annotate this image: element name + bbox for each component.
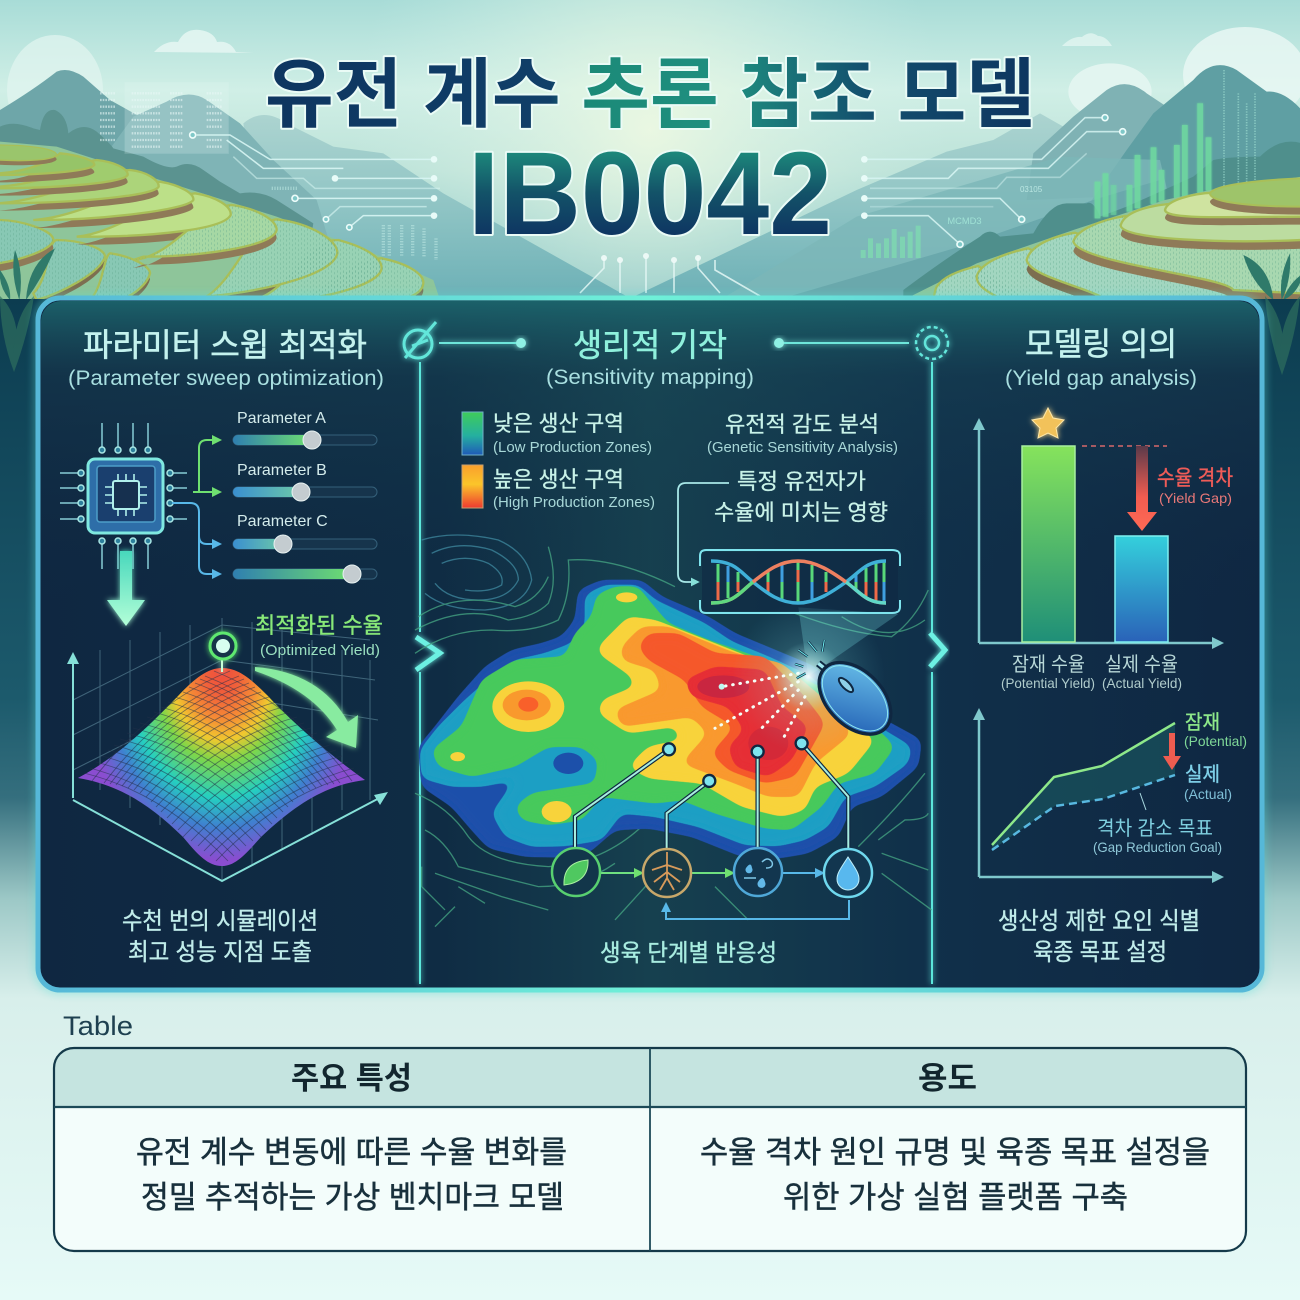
arrow: gap	[1163, 733, 1181, 770]
label: potential yield	[1001, 653, 1095, 691]
circuit end dots left	[332, 156, 437, 219]
heading: physiological mechanism: 생리적 기작	[573, 327, 727, 363]
circuit end dots right	[861, 156, 868, 219]
title code: IB0042	[468, 128, 832, 260]
table cell: use	[700, 1135, 1210, 1215]
peak marker	[210, 633, 236, 672]
rice plant right	[1243, 253, 1300, 300]
circuit lines left	[197, 135, 440, 227]
chevron left	[416, 637, 440, 670]
label: potential yield: (Potential Yield)	[1001, 675, 1095, 691]
table header: key characteristics: 주요 특성	[291, 1061, 412, 1096]
slider: parameter B	[233, 462, 377, 501]
caption: breeding goals: 생산성 제한 요인 식별	[998, 908, 1200, 935]
heading: parameter sweep: 파라미터 스윕 최적화	[83, 327, 367, 363]
small bars	[861, 226, 921, 258]
label: yield gap: 수율 격차	[1157, 467, 1233, 490]
slider: fourth	[233, 565, 377, 583]
arrow: descent curve	[255, 667, 358, 748]
DNA panel	[700, 550, 900, 613]
subheading: sensitivity: (Sensitivity mapping)	[546, 366, 754, 389]
legend: high production: (High Production Zones)	[493, 494, 655, 511]
icon: star	[1032, 408, 1064, 438]
table cell: characteristics	[136, 1135, 567, 1215]
slider: parameter A: Parameter A	[237, 410, 326, 427]
label: optimized yield: (Optimized Yield)	[260, 642, 380, 659]
header connector left	[439, 338, 526, 348]
legend: low production: (Low Production Zones)	[493, 439, 652, 456]
header connector right	[774, 338, 909, 348]
label: actual yield: (Actual Yield)	[1102, 675, 1182, 691]
background lower page gradient	[0, 296, 1300, 1300]
chevron right	[930, 633, 945, 667]
panel: modeling meaning	[973, 326, 1247, 966]
main dashboard panel	[33, 293, 1267, 995]
chart: 3D yield surface	[67, 618, 388, 881]
rice plant left	[0, 248, 55, 300]
code label 2: MCMD3	[947, 216, 982, 226]
spark ticks	[795, 640, 824, 678]
column dividers	[420, 362, 932, 984]
gene arrow	[678, 483, 729, 582]
stage: water	[824, 849, 872, 897]
code label: 03105	[1020, 185, 1043, 194]
forest silhouette left	[0, 110, 314, 228]
stage: nutrients	[734, 848, 782, 896]
rice terraces right	[912, 176, 1300, 299]
label: actual: 실제	[1185, 763, 1220, 786]
label: gap reduction goal	[1093, 817, 1222, 855]
slider: parameter C	[233, 513, 377, 553]
topographic lines	[415, 535, 932, 927]
circuit nodes right	[957, 115, 1126, 247]
label: actual	[1184, 763, 1232, 802]
table cell: use: 수율 격차 원인 규명 및 육종 목표 설정을	[700, 1135, 1210, 1170]
label: potential	[1184, 711, 1247, 749]
stage: leaf	[552, 848, 600, 896]
chart: gap line	[973, 708, 1247, 883]
heat map	[418, 580, 922, 858]
caption: breeding goals	[998, 908, 1200, 966]
arrow: chip to surface	[107, 551, 145, 626]
panel: parameter sweep	[60, 327, 388, 966]
caption: breeding goals: 육종 목표 설정	[1033, 939, 1167, 966]
table cell: characteristics: 유전 계수 변동에 따른 수율 변화를	[136, 1135, 567, 1170]
light cone	[798, 607, 898, 677]
dotted rays	[715, 673, 805, 738]
table cell: use: 위한 가상 실험 플랫폼 구축	[783, 1180, 1128, 1215]
side leaves	[0, 296, 1300, 375]
subheading: yield gap: (Yield gap analysis)	[1005, 367, 1197, 390]
stage: roots	[643, 849, 691, 897]
label: potential yield: 잠재 수율	[1012, 653, 1085, 676]
title: 유전 계수 추론 참조 모델	[265, 53, 1035, 138]
label: actual yield: 실제 수율	[1105, 653, 1178, 676]
caption: growth stage response: 생육 단계별 반응성	[600, 940, 777, 967]
circuit lines right	[865, 118, 1119, 243]
table header: use: 용도	[918, 1061, 977, 1096]
icon: chip	[60, 423, 187, 569]
label: genetic sensitivity: (Genetic Sensitivity Analysis)	[707, 439, 898, 456]
legend: low production	[462, 411, 652, 456]
left landscape	[0, 70, 633, 307]
data strips	[272, 188, 436, 260]
label: optimized yield	[255, 613, 383, 659]
green bars right	[1095, 103, 1211, 218]
label: yield gap: (Yield Gap)	[1159, 490, 1232, 506]
title	[265, 53, 1035, 260]
table	[54, 1048, 1246, 1251]
label: yield gap	[1157, 467, 1233, 506]
legend: low production: 낮은 생산 구역	[493, 411, 624, 436]
forest silhouette right	[903, 142, 1300, 300]
legend: high production: 높은 생산 구역	[493, 467, 624, 492]
table caption: Table	[63, 1011, 133, 1041]
slider: parameter B: Parameter B	[237, 462, 327, 479]
slider: parameter C: Parameter C	[237, 513, 328, 530]
label: gene effect: 특정 유전자가	[737, 469, 866, 494]
icon: mouse	[805, 649, 904, 748]
rice terraces left	[0, 142, 440, 307]
caption: simulation	[122, 908, 318, 966]
slider: parameter A	[233, 410, 377, 449]
icon: gear sun	[916, 327, 948, 359]
label: actual: (Actual)	[1184, 786, 1232, 802]
legend: high production	[462, 465, 655, 511]
cloud right	[1062, 33, 1112, 46]
heading: modeling significance: 모델링 의의	[1025, 326, 1177, 362]
landscape scene	[0, 0, 1300, 309]
label: gene effect: 수율에 미치는 영향	[714, 500, 888, 525]
connectors blue	[172, 503, 220, 574]
caption: simulation: 수천 번의 시뮬레이션	[122, 908, 318, 935]
stage arrows	[601, 873, 849, 919]
label: genetic sensitivity	[707, 412, 898, 456]
right landscape	[627, 63, 1300, 309]
cloud left	[154, 30, 254, 53]
chart: yield gap bars	[973, 408, 1233, 691]
icon: leaf circuit	[404, 322, 436, 358]
data table ghost	[100, 92, 229, 154]
label: actual yield	[1102, 653, 1182, 691]
label: potential: 잠재	[1185, 711, 1220, 734]
subheading: parameter sweep: (Parameter sweep optimization)	[68, 367, 384, 390]
label: gap reduction goal: 격차 감소 목표	[1097, 817, 1213, 840]
arrow: yield gap	[1127, 446, 1157, 531]
growth stage flow	[552, 848, 872, 919]
circuit nodes left	[190, 132, 352, 230]
label: potential: (Potential)	[1184, 733, 1247, 749]
label: genetic sensitivity: 유전적 감도 분석	[725, 412, 879, 437]
label: gene effect	[714, 469, 888, 525]
caption: simulation: 최고 성능 지점 도출	[128, 939, 312, 966]
bottom circuit lines	[580, 258, 760, 296]
label: optimized yield: 최적화된 수율	[255, 613, 383, 638]
label: gap reduction goal: (Gap Reduction Goal)	[1093, 839, 1222, 855]
bottom circuit dots	[601, 253, 701, 263]
stage pin lines	[575, 737, 848, 850]
connectors green	[193, 440, 220, 492]
panel: sensitivity mapping	[415, 327, 932, 967]
data strips right	[1224, 70, 1255, 197]
table cell: characteristics: 정밀 추적하는 가상 벤치마크 모델	[141, 1180, 564, 1215]
